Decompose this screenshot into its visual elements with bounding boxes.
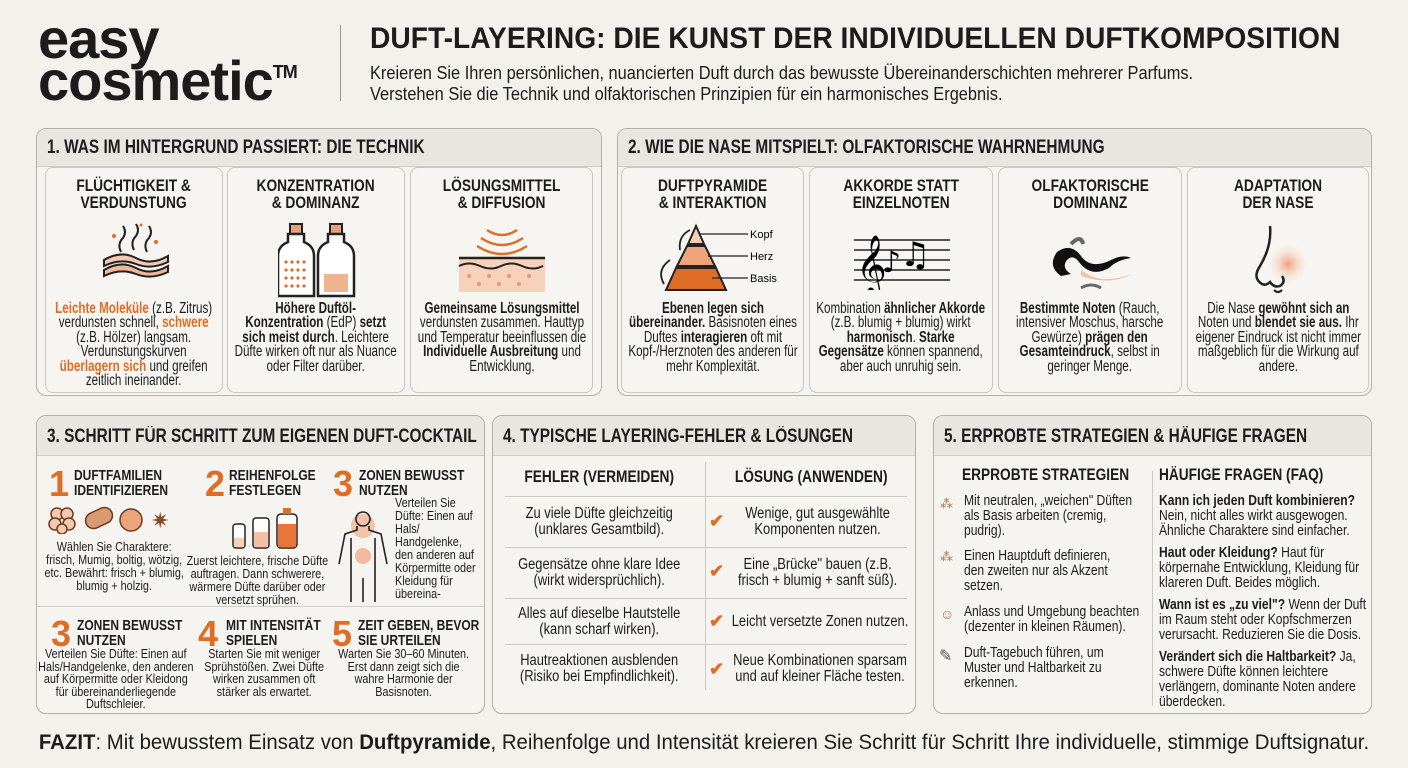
panel: wahrnehmung: 2. WIE DIE NASE MITSPIELT: OLFAKTORISCHE WAHRNEHMUNG [628,137,1105,158]
table: (unklares Gesamtbild). [534,521,664,538]
icon: spray bottles [232,508,298,549]
step 1: IDENTIFIZIEREN [74,482,168,499]
panel: fehler & loesungen: 4. TYPISCHE LAYERING-FEHLER & LÖSUNGEN [503,426,853,447]
step 2: Zuerst leichtere, frische Düfte auftragen. Dann schwerere, wärmere Düfte darüber oder versetzt sprühen. [186,553,328,607]
icon: families [48,506,169,534]
panel: technik [36,128,602,396]
card: adaptation: ADAPTATION [1234,177,1322,195]
step 2: 2 [205,463,225,504]
card: fluechtigkeit: VERDUNSTUNG [81,194,187,212]
step 1: DUFTFAMILIEN [74,467,162,484]
step 5: 5 [332,613,352,654]
step 3 top: NUTZEN [359,482,408,499]
table: Komponenten nutzen. [755,521,881,538]
table: (kann scharf wirken). [539,621,659,638]
card: duftpyramide: Ebenen legen sich übereinander. Basisnoten eines Duftes interagieren oft mit Kopf-/Herznoten des anderen für mehr Komplexität. [628,300,797,375]
panel: technik: 1. WAS IM HINTERGRUND PASSIERT: DIE TECHNIK [47,137,425,158]
icon: pyramid: Kopf [750,229,774,241]
table: FEHLER (VERMEIDEN) [524,468,674,486]
subtitle: Kreieren Sie Ihren persönlichen, nuancierten Duft durch das bewusste Übereinanderschichten mehrerer Parfums. [370,63,1193,83]
strategies: Anlass und Umgebung beachten (dezenter in kleinen Räumen). [964,604,1139,635]
step 5: SIE URTEILEN [358,632,441,649]
table: ✔ [709,659,724,679]
icon: nose [1255,226,1304,293]
icon: pyramid: Herz [750,251,773,263]
icon: swirl [1052,237,1131,290]
icon: skin diffusion [458,229,545,292]
step 4 [198,613,324,698]
card: duftpyramide: DUFTPYRAMIDE [658,177,767,195]
step 5: Warten Sie 30–60 Minuten. Erst dann zeigt sich die wahre Harmonie der Basisnoten. [339,646,469,698]
logo: cosmeticTM [38,49,297,112]
strategies: Mit neutralen, „weichen" Düften als Basis arbeiten (cremig, pudrig). [964,493,1132,539]
step 5: ZEIT GEBEN, BEVOR [358,617,479,634]
logo [38,7,297,112]
icon: music notes [854,235,950,290]
step 3 top [333,463,476,602]
table: Neue Kombinationen sparsam [733,652,907,669]
card: konzentration: Konzentration (EdP) setzt sich meist durch. Leichtere Düfte wirken oft nur als Nuance oder Filter darüber. [235,314,397,375]
step 3 top: ZONEN BEWUSST [359,467,464,484]
table: Gegensätze ohne klare Idee [518,556,680,573]
card: loesungsmittel: LÖSUNGSMITTEL [443,177,560,195]
subtitle [370,63,1193,104]
card: dominanz [998,167,1182,393]
step 1: 1 [49,463,69,504]
card: fluechtigkeit: FLÜCHTIGKEIT & [77,177,191,195]
card: konzentration: Höhere Duftöl- [276,300,356,317]
table: Eine „Brücke" bauen (z.B. [744,556,892,573]
logo: easy [38,7,159,70]
step 4: MIT INTENSITÄT [226,617,321,634]
table: Leicht versetzte Zonen nutzen. [732,613,908,630]
step 3 bottom: ZONEN BEWUSST [77,617,182,634]
icon: families: ✷ [151,508,169,533]
strategies: ⁂ [940,549,953,564]
step 5 [332,613,479,698]
table: Hautreaktionen ausblenden [520,652,678,669]
card: duftpyramide: & INTERAKTION [659,194,766,212]
table: ✔ [709,611,724,631]
table: Zu viele Düfte gleichzeitig [525,505,673,522]
card: akkorde: AKKORDE STATT [843,177,959,195]
panel: strategien & faq: 5. ERPROBTE STRATEGIEN & HÄUFIGE FRAGEN [944,426,1307,447]
step 2: REIHENFOLGE [229,467,316,484]
card: fluechtigkeit [45,167,223,393]
icon: pyramid: Basis [750,273,777,285]
icon: evaporation [103,224,169,278]
table: (Risiko bei Empfindlichkeit). [520,668,678,685]
icon: body [338,511,388,602]
table: Wenige, gut ausgewählte [746,505,890,522]
faq: Kann ich jeden Duft kombinieren? Nein, nicht alles wirkt ausgewogen. Ähnliche Charaktere sind einfacher. [1159,493,1355,539]
card: dominanz: DOMINANZ [1053,194,1127,212]
table: und auf kleiner Fläche testen. [735,668,905,685]
table [505,462,908,690]
card: konzentration: & DOMINANZ [272,194,360,212]
table: frisch + blumig + sanft süß). [738,572,898,589]
strategies: ☺ [940,606,954,622]
title: DUFT-LAYERING: DIE KUNST DER INDIVIDUELLEN DUFTKOMPOSITION [370,22,1340,55]
icon: music notes: ♪ [882,245,901,280]
faq: Haut oder Kleidung? Haut für körpernahe Entwicklung, Kleidung für klareren Duft. Beides möglich. [1159,545,1359,591]
panel: fehler & loesungen [492,415,916,714]
card: dominanz: OLFAKTORISCHE [1031,177,1149,195]
footer: fazit: FAZIT: Mit bewusstem Einsatz von Duftpyramide, Reihenfolge und Intensität kreieren Sie Schritt für Schritt Ihre individuelle, stimmige Duftsignatur. [39,731,1369,754]
card: akkorde: EINZELNOTEN [853,194,949,212]
icon: music notes: ♫ [900,235,930,275]
step 1: Wählen Sie Charaktere: frisch, Mumig, boltig, wötzig, etc. Bewährt: frisch + blumig, blumig + holzig. [44,539,184,593]
step 2: FESTLEGEN [229,482,301,499]
panel: wahrnehmung [617,128,1372,396]
card: loesungsmittel [410,167,593,393]
card: loesungsmittel: & DIFFUSION [458,194,545,212]
card: adaptation: DER NASE [1242,194,1314,212]
step 3 bottom: 3 [51,613,71,654]
step 3 top: 3 [333,463,353,504]
step 3 bottom [38,613,194,711]
card: konzentration [227,167,405,393]
table: LÖSUNG (ANWENDEN) [735,468,887,486]
strategies: Duft-Tagebuch führen, um Muster und Haltbarkeit zu erkennen. [964,645,1104,691]
card: akkorde: Kombination ähnlicher Akkorde (z.B. blumig + blumig) wirkt harmonisch. Starke Gegensätze können spannend, aber auch unruhig sein. [817,300,985,375]
faq: Wann ist es „zu viel"? Wenn der Duft im Raum steht oder Kopfschmerzen verursacht. Reduzieren Sie die Dosis. [1159,597,1366,643]
card: duftpyramide [621,167,804,393]
faq [1159,466,1366,710]
table: ✔ [709,561,724,581]
card: akkorde [809,167,993,393]
step 3 bottom: Verteilen Sie Düfte: Einen auf Hals/Handgelenke, den anderen auf Körpermitte oder Kleidong für übereinanderliegende Duftschleier. [38,646,194,711]
card: dominanz: Bestimmte Noten (Rauch, intensiver Moschus, harsche Gewürze) prägen den Gesamteindruck, selbst in geringer Menge. [1016,300,1164,375]
card: loesungsmittel: Gemeinsame Lösungsmittel verdunsten zusammen. Hauttyp und Temperatur beeinflussen die Individuelle Ausbreitung und Entwicklung. [417,300,586,375]
card: adaptation: Die Nase gewöhnt sich an Noten und blendet sie aus. Ihr eigener Eindruck ist nicht immer maßgeblich für die Wirkung auf andere. [1195,300,1361,375]
step 4: 4 [198,613,218,654]
panel: schritt fuer schritt: 3. SCHRITT FÜR SCHRITT ZUM EIGENEN DUFT-COCKTAIL [47,426,477,447]
strategies: ERPROBTE STRATEGIEN [962,466,1129,484]
panel: strategien & faq [933,415,1372,714]
faq: HÄUFIGE FRAGEN (FAQ) [1159,466,1323,484]
icon: pyramid [660,224,777,291]
card: konzentration: KONZENTRATION [257,177,375,195]
strategies: Einen Hauptduft definieren, den zweiten nur als Akzent setzen. [964,548,1110,594]
table: Alles auf dieselbe Hautstelle [518,605,680,622]
strategies [939,466,1139,691]
card: fluechtigkeit: Leichte Moleküle (z.B. Zitrus) verdunsten schnell, schwere (z.B. Hölzer) langsam. Verdunstungskurven überlagern sich und greifen zeitlich ineinander. [55,300,212,389]
table: ✔ [709,511,724,531]
strategies: ⁂ [940,496,953,511]
faq: Verändert sich die Haltbarkeit? Ja, schwere Düfte können leichtere verlängern, dominante Noten andere überdecken. [1159,649,1356,710]
icon: bottles [278,223,356,298]
step 2 [186,463,328,607]
card: adaptation [1187,167,1369,393]
table: (wirkt widersprüchlich). [533,572,665,589]
step 4: Starten Sie mit weniger Sprühstößen. Zwei Düfte wirken zusammen oft stärker als erwartet. [204,646,324,698]
panel: schritt fuer schritt [36,415,485,714]
step 3 top: Verteilen Sie Düfte: Einen auf Hals/ Handgelenke, den anderen auf Körpermitte oder Kleidung für übereina- [395,495,476,601]
step 3 bottom: NUTZEN [77,632,126,649]
step 1 [44,463,184,593]
subtitle: Verstehen Sie die Technik und olfaktorischen Prinzipien für ein harmonisches Ergebnis. [370,84,1003,104]
step 4: SPIELEN [226,632,277,649]
strategies: ✎ [939,648,952,665]
